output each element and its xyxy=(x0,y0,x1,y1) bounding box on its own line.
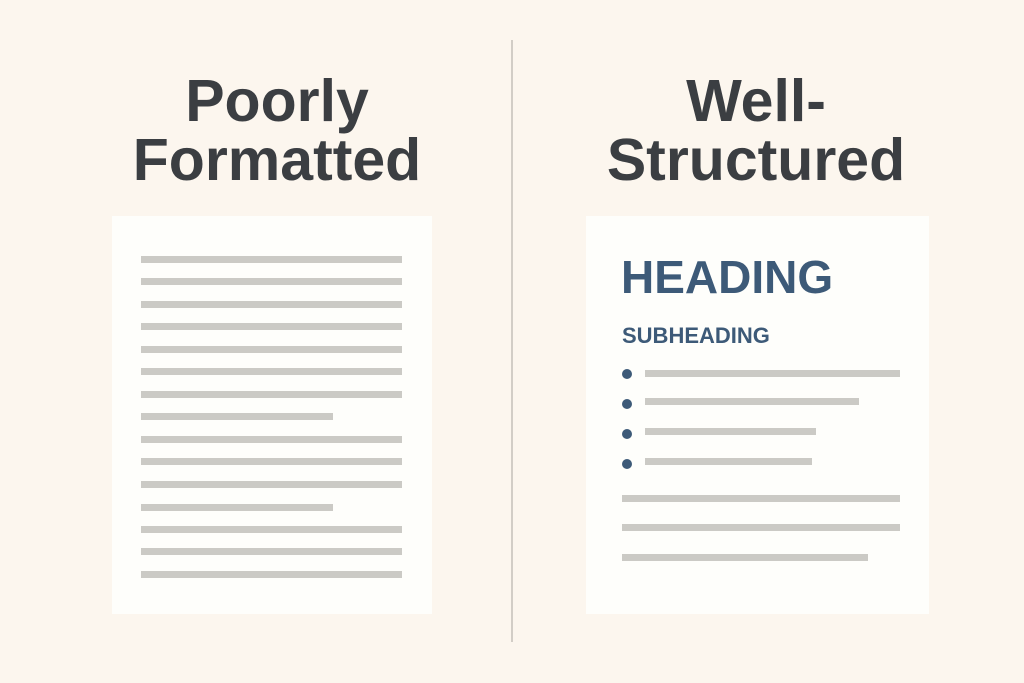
panel: poorly formatted document xyxy=(112,216,432,614)
divider xyxy=(511,40,513,642)
title: poorly formatted: Poorly xyxy=(185,68,369,134)
title: well-structured xyxy=(607,68,905,193)
title: poorly formatted xyxy=(133,68,421,193)
title: poorly formatted: Formatted xyxy=(133,127,421,193)
title: well-structured: Structured xyxy=(607,127,905,193)
paragraph lines xyxy=(622,495,900,561)
subheading: SUBHEADING xyxy=(622,323,770,348)
heading: HEADING xyxy=(621,251,833,303)
bullet list xyxy=(622,369,900,469)
title: well-structured: Well- xyxy=(686,68,826,134)
panel: well-structured document xyxy=(586,216,929,614)
